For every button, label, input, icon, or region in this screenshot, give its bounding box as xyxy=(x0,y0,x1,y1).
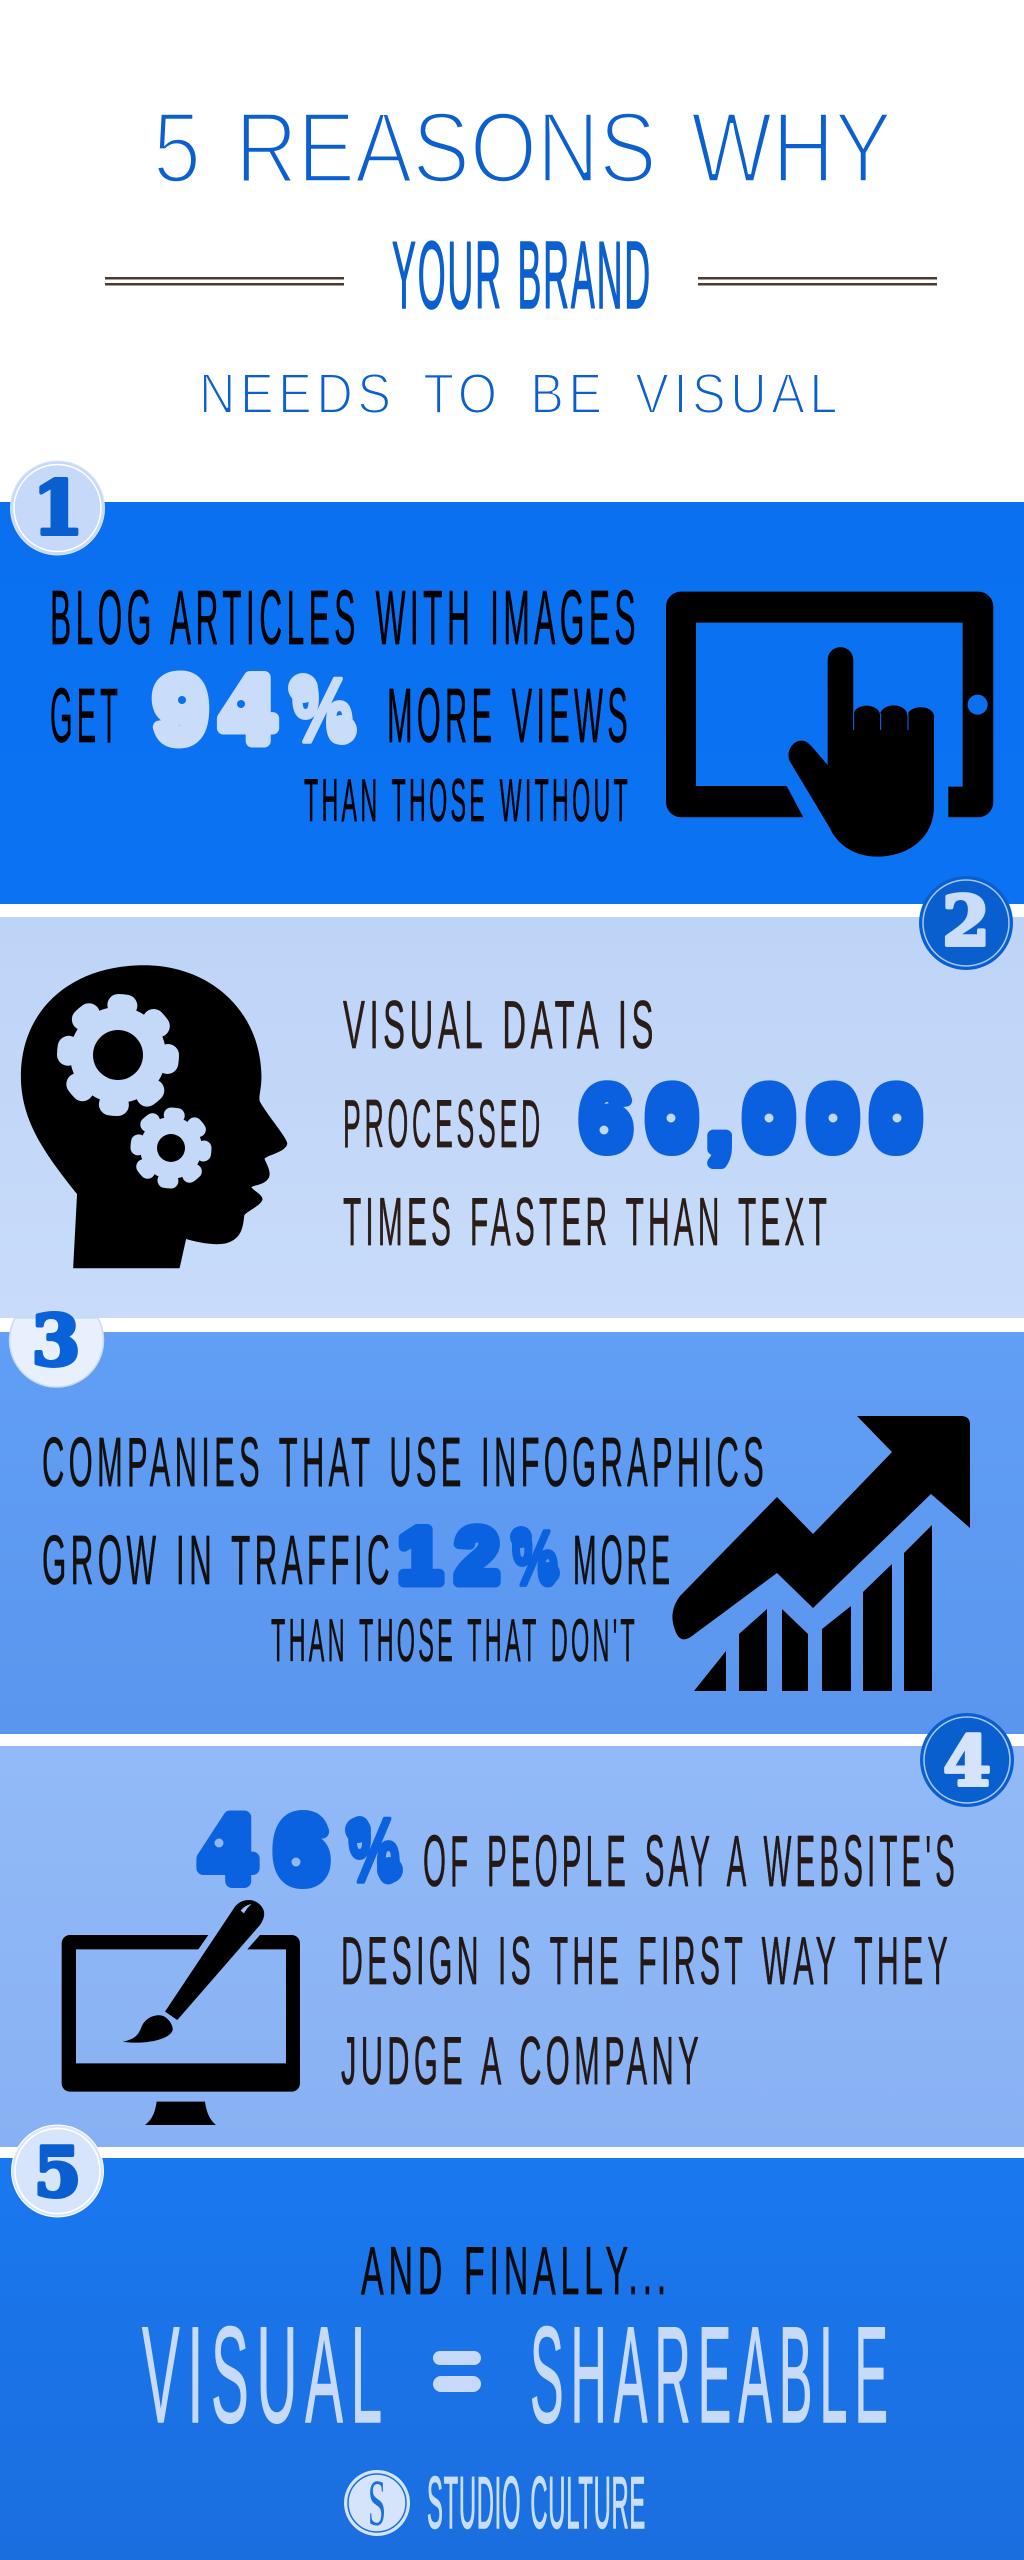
badge 5 xyxy=(12,2125,104,2217)
panel 3: infographics xyxy=(0,1332,1024,1734)
icon: monitor and paintbrush xyxy=(62,1900,300,2125)
icon: tablet with pointing hand xyxy=(666,592,993,857)
stat: 12%: % xyxy=(512,1514,558,1602)
icon: head with gears xyxy=(21,965,287,1268)
badge 2 xyxy=(919,876,1013,970)
panel 2 text xyxy=(343,987,831,1260)
icon: rising arrow and bars xyxy=(672,1416,970,1691)
gear large xyxy=(68,1005,168,1105)
gear small xyxy=(138,1115,204,1181)
stat: 46%: % xyxy=(348,1800,400,1902)
badge 4 xyxy=(920,1713,1014,1807)
stat: 60,000: 60,000 xyxy=(581,1069,921,1169)
panel 2 text: VISUAL DATA IS xyxy=(343,987,658,1063)
right rule xyxy=(698,277,937,286)
panel 4 text xyxy=(341,1822,959,2099)
panel 3 text: MORE xyxy=(573,1521,674,1599)
panel 1: blog articles: MORE VIEWS xyxy=(387,673,632,759)
header xyxy=(105,92,937,426)
badge 2: 2 xyxy=(942,882,990,962)
stat: 46% xyxy=(202,1799,403,1902)
badge 1 xyxy=(10,461,104,555)
stat: 46%: 46 xyxy=(202,1799,327,1901)
badge 3: 3 xyxy=(32,1299,80,1382)
badge 3 xyxy=(9,1299,103,1387)
left rule xyxy=(105,277,344,286)
bars xyxy=(694,1525,932,1691)
logo mark xyxy=(344,2467,410,2540)
equals sign xyxy=(433,2351,481,2392)
badge 5: 5 xyxy=(34,2133,81,2213)
title line: 5 reasons why: 5 REASONS WHY xyxy=(153,92,892,204)
logo mark: S xyxy=(368,2467,386,2540)
stat: 94%: % xyxy=(292,660,353,762)
panel 2 text: PROCESSED xyxy=(343,1086,544,1162)
panel 4: website design xyxy=(0,1746,1024,2147)
badge 4: 4 xyxy=(943,1722,991,1802)
panel 3 text xyxy=(42,1423,768,1674)
tagline: needs to be visual: NEEDS TO BE VISUAL xyxy=(199,362,842,426)
panel 2: visual data xyxy=(0,917,1024,1318)
panel 1 text xyxy=(50,575,640,834)
panel 5: closing xyxy=(0,2158,1024,2560)
panel 1: blog articles xyxy=(0,502,1024,904)
stat: 94%: 94 xyxy=(155,659,273,761)
stat: 12% xyxy=(399,1514,560,1602)
stat: 94% xyxy=(155,659,357,762)
and finally: AND FINALLY... xyxy=(361,2233,671,2309)
stat: 12%: 12 xyxy=(399,1514,498,1599)
badge 1: 1 xyxy=(32,466,84,552)
panel 5: closing: VISUAL xyxy=(142,2299,390,2452)
panel 3 text: GROW IN TRAFFIC xyxy=(42,1521,394,1599)
panel 1 text: GET xyxy=(50,673,122,759)
